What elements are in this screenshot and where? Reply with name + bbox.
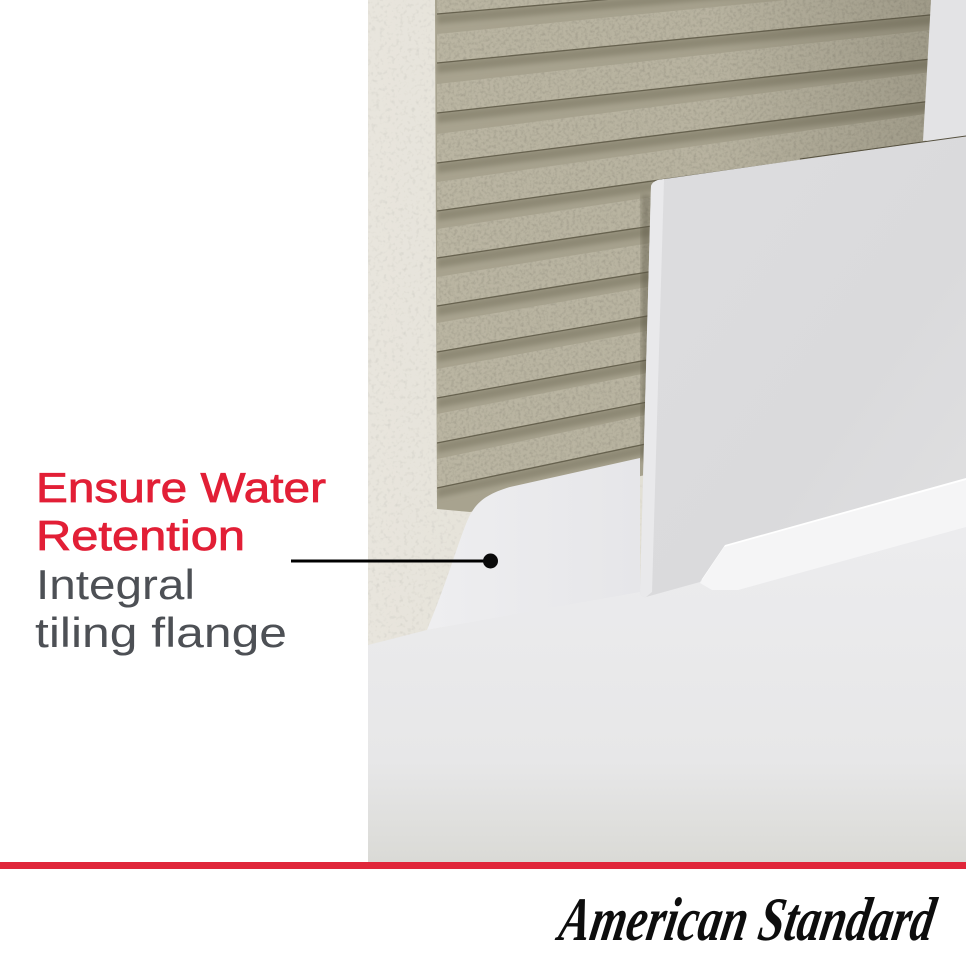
tile trim bead	[700, 480, 966, 590]
flange	[427, 458, 640, 630]
callout description: Integral	[36, 561, 195, 608]
callout heading	[36, 464, 326, 559]
upper right tile	[923, 0, 966, 141]
callout leader line with dot	[291, 554, 498, 568]
callout text	[35, 464, 326, 656]
red footer rule	[0, 862, 966, 869]
wall tile	[640, 136, 966, 597]
callout heading: Ensure Water	[36, 464, 326, 511]
plaster wall	[368, 0, 668, 660]
ridged tile adhesive	[433, 0, 943, 515]
installation illustration	[368, 0, 966, 862]
shower tray	[368, 527, 966, 862]
callout description	[35, 561, 287, 656]
callout description: tiling flange	[35, 609, 287, 656]
callout heading: Retention	[36, 512, 245, 559]
